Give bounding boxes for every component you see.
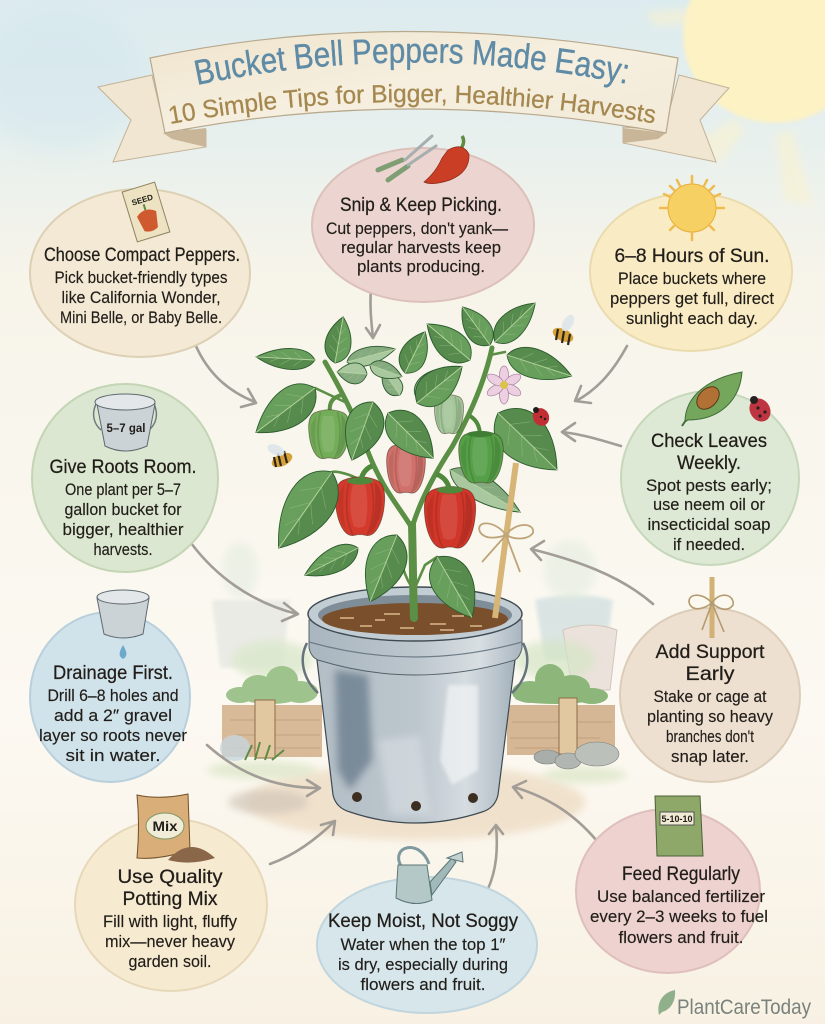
icon: pruners: [378, 136, 436, 180]
text: leaves: if needed.: [673, 536, 745, 554]
text: compact peppers: [44, 244, 240, 327]
text: roots: One plant per 5–7: [65, 481, 181, 499]
icon: five to seven gallon bucket: [94, 394, 156, 451]
text: leaves: Weekly.: [677, 452, 741, 474]
left ribbon tail: [98, 75, 206, 162]
text: compact peppers: Mini Belle, or Baby Belle.: [60, 309, 222, 327]
tip: use quality potting mix: [75, 794, 267, 991]
icon: beetle on leaf: [682, 372, 742, 426]
front leaves: [335, 354, 472, 471]
icon: fertilizer bag: 5-10-10: [662, 814, 692, 825]
tip: keep moist not soggy: [317, 848, 537, 1013]
text: feed: Feed Regularly: [622, 863, 740, 885]
bamboo stake and twine: [479, 463, 533, 618]
icon: ladybug: [745, 395, 775, 425]
text: roots: harvests.: [94, 541, 152, 559]
text: snip: regular harvests keep: [341, 239, 501, 257]
rocks and grass: [220, 735, 619, 769]
icon: seed packet: [122, 182, 170, 242]
tip: check leaves weekly: [621, 372, 799, 565]
banner heading: 10 Simple Tips for Bigger, Healthier Harvests: [170, 84, 656, 124]
text: support: branches don't: [666, 728, 754, 746]
arrow: feed: [513, 781, 597, 841]
logo leaf icon: [658, 990, 675, 1015]
raised wooden bed: [222, 698, 615, 758]
text: potting: mix—never heavy: [105, 933, 236, 951]
arrow: check leaves: [562, 423, 621, 446]
bucket body: [317, 660, 515, 823]
text: sun: sunlight each day.: [626, 310, 758, 328]
sun glow in sky: [0, 0, 825, 205]
text: snip: [326, 194, 508, 276]
text: roots: gallon bucket for: [64, 501, 182, 519]
text: roots: [50, 456, 196, 559]
bucket shading washes: [335, 670, 478, 815]
icon: seed packet: SEED: [131, 192, 154, 208]
text: support: Early: [686, 663, 735, 685]
bucket handles: [303, 643, 527, 693]
text: leaves: Spot pests early;: [646, 477, 772, 495]
text: support: [647, 641, 774, 766]
tip: choose compact peppers: [30, 182, 250, 357]
text: drainage: Drainage First.: [53, 662, 173, 684]
right fold: [623, 128, 666, 143]
bucket drain holes: [352, 792, 478, 811]
text: leaves: Check Leaves: [651, 430, 767, 452]
text: feed: flowers and fruit.: [618, 929, 744, 947]
text: potting: Use Quality: [118, 866, 223, 888]
text: compact peppers: like California Wonder,: [62, 289, 220, 307]
arrow: roots room: [191, 543, 298, 621]
pale red pepper: [387, 443, 425, 493]
text: support: snap later.: [671, 748, 749, 766]
PlantCareToday logo: PlantCareToday: [677, 996, 811, 1019]
text: roots: Give Roots Room.: [50, 456, 196, 478]
text: roots: bigger, healthier: [62, 521, 184, 539]
icon: stake with twine bow: [689, 577, 733, 638]
arrows pointing to the plant: [191, 281, 653, 891]
banner heading: Bucket Bell Peppers Made Easy:: [194, 39, 628, 88]
arrow: drainage: [207, 745, 320, 796]
text: potting: Fill with light, fluffy: [103, 913, 238, 931]
PlantCareToday logo: [658, 990, 811, 1019]
icon: watering can: [396, 848, 463, 904]
upper bee: [550, 313, 577, 345]
arrow: snip: [366, 281, 380, 338]
text: moist: flowers and fruit.: [360, 976, 486, 994]
icon: bucket with drip: [97, 590, 149, 659]
text: drainage: Drill 6–8 holes and: [48, 687, 178, 705]
tip: drainage first: [30, 590, 190, 782]
text: support: planting so heavy: [647, 708, 774, 726]
icon: red pepper: [424, 136, 469, 184]
green bushes: [226, 640, 608, 704]
arrow: sun: [575, 346, 627, 403]
text: sun: 6–8 Hours of Sun.: [614, 245, 770, 267]
faded background pots: [212, 540, 617, 690]
arrow: compact peppers: [193, 339, 256, 407]
background garden scene: [207, 540, 627, 840]
text: sun: [610, 245, 774, 328]
text: moist: is dry, especially during: [338, 956, 508, 974]
left fold: [163, 128, 206, 147]
tip: snip and keep picking: [312, 136, 534, 302]
tip: feed regularly: [576, 796, 768, 973]
text: sun: peppers get full, direct: [610, 290, 774, 308]
text: support: Add Support: [656, 641, 765, 663]
banner heading: [170, 39, 656, 124]
text: snip: Cut peppers, don't yank—: [326, 220, 508, 238]
text: snip: plants producing.: [357, 258, 485, 276]
pink flower: [485, 366, 523, 404]
ribbon body: [150, 32, 678, 133]
galvanized bucket: [303, 587, 527, 823]
text: potting: garden soil.: [128, 953, 212, 971]
text: moist: Keep Moist, Not Soggy: [328, 910, 518, 932]
tip: add support early: [620, 577, 800, 782]
text: leaves: [646, 430, 772, 554]
text: sun: Place buckets where: [618, 270, 766, 288]
arrow: potting mix: [270, 821, 335, 864]
icon: potting mix bag: Mix: [152, 818, 178, 834]
text: snip: Snip & Keep Picking.: [340, 194, 502, 216]
text: moist: [328, 910, 518, 994]
text: drainage: sit in water.: [66, 747, 160, 765]
main stem and branches: [315, 348, 505, 618]
arrow: keep moist: [487, 825, 503, 891]
lower bee: [266, 442, 295, 470]
tip: six to eight hours of sun: [590, 176, 792, 351]
text: feed: every 2–3 weeks to fuel: [590, 908, 768, 926]
text: leaves: use neem oil or: [653, 496, 765, 514]
green peppers: [309, 395, 503, 483]
text: leaves: insecticidal soap: [648, 516, 770, 534]
red peppers: [335, 466, 476, 548]
text: potting: [103, 866, 238, 971]
icon: five to seven gallon bucket: 5–7 gal: [106, 421, 146, 435]
text: potting: Potting Mix: [122, 888, 218, 910]
right ribbon tail: [623, 75, 729, 162]
icon: fertilizer bag: [655, 796, 703, 856]
soil wash on ground: [207, 761, 627, 840]
text: moist: Water when the top 1″: [340, 936, 506, 954]
text: feed: Use balanced fertilizer: [597, 888, 766, 906]
pale background leaves: [336, 340, 527, 523]
text: compact peppers: Pick bucket-friendly types: [54, 269, 228, 287]
title banner: [97, 30, 730, 163]
text: support: Stake or cage at: [654, 688, 767, 706]
text: drainage: add a 2″ gravel: [54, 707, 172, 725]
soil: [322, 603, 508, 635]
arrow: support: [531, 541, 653, 604]
ladybug on leaf: [530, 405, 552, 429]
bucket band: [309, 620, 522, 675]
tip: give roots room: [32, 384, 218, 572]
bucket rim: [308, 587, 522, 641]
icon: sun: [660, 176, 724, 240]
icon: potting mix bag: [137, 794, 215, 863]
lower leaves: [260, 459, 490, 627]
text: feed: [590, 863, 768, 947]
text: drainage: [39, 662, 188, 765]
leaves: [245, 294, 576, 487]
text: drainage: layer so roots never: [39, 727, 188, 745]
text: compact peppers: Choose Compact Peppers.: [44, 244, 240, 266]
bell pepper plant: [245, 294, 577, 627]
